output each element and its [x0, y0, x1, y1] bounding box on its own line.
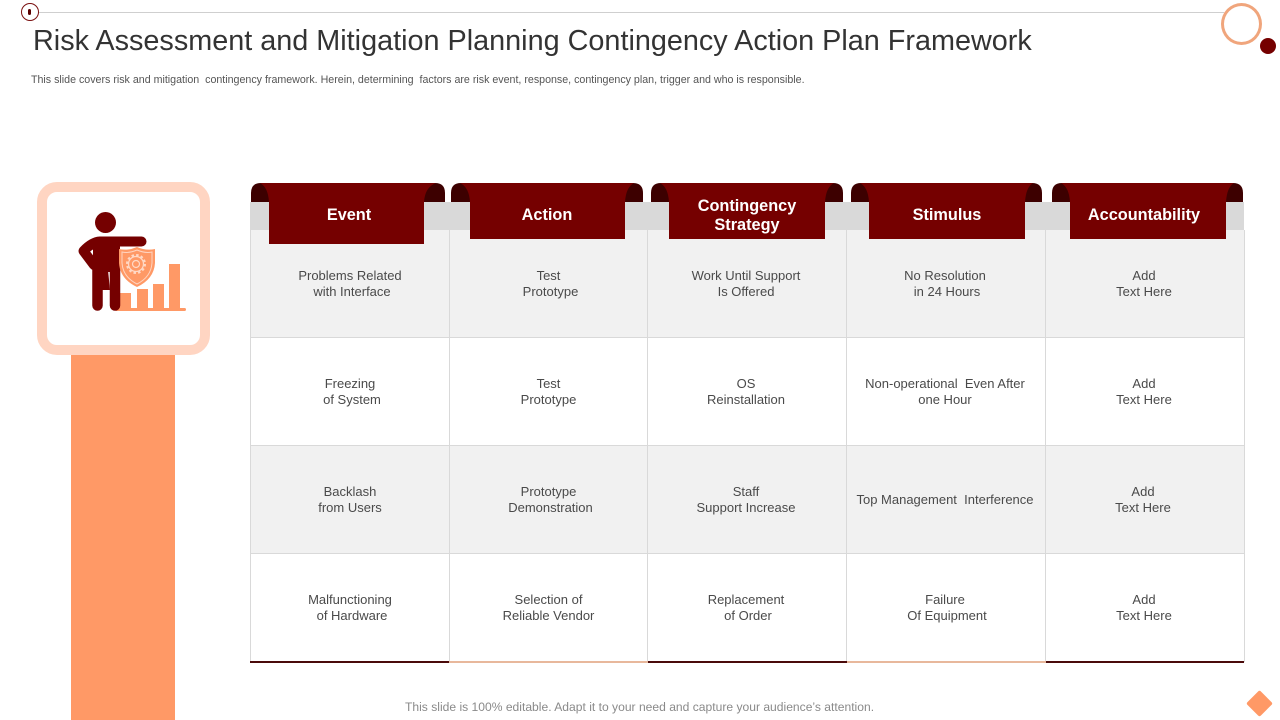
panel: table grey header band — [250, 202, 1244, 230]
row 4 — [250, 554, 1245, 662]
row 1: Is Offered — [718, 284, 774, 298]
row 2: of System — [323, 392, 381, 406]
icon: person with shield and bar chart — [78, 212, 186, 311]
header: Action: Action — [522, 206, 572, 224]
row 3: Staff — [733, 484, 759, 498]
row 4: Add — [1132, 592, 1156, 607]
header: Event: Event — [327, 206, 371, 224]
row 2 — [250, 338, 1245, 446]
row 3: Support Increase — [696, 500, 796, 514]
icon: top left marker — [21, 3, 39, 21]
header: Stimulus — [851, 183, 1042, 239]
footer note: This slide is 100% editable. Adapt it to your need and capture your audience’s attention. — [405, 700, 874, 714]
row 1: in 24 Hours — [914, 284, 980, 298]
table — [250, 230, 1245, 662]
header: Action — [451, 183, 643, 239]
panel: icon tile — [37, 182, 210, 355]
row 4: Of Equipment — [907, 608, 987, 623]
row 1 — [250, 230, 1245, 338]
row 4: Replacement — [708, 592, 784, 607]
row 2: one Hour — [918, 392, 972, 406]
row 4: Text Here — [1116, 608, 1172, 623]
row 1: Test — [537, 268, 560, 282]
header: Accountability: Accountability — [1088, 206, 1200, 224]
row 4: Selection of — [515, 592, 582, 607]
title: Risk Assessment and Mitigation Planning Contingency Action Plan Framework — [33, 25, 1032, 57]
row 1: No Resolution — [904, 268, 986, 282]
row 1: Work Until Support — [692, 268, 800, 282]
row 2: Add — [1132, 376, 1156, 390]
icon: top right dot — [1260, 38, 1276, 54]
row 2: Freezing — [325, 376, 375, 390]
row 3: Backlash — [324, 484, 376, 498]
row 3 — [250, 446, 1245, 554]
bottom rules — [250, 661, 1244, 663]
row 4: Failure — [925, 592, 965, 607]
icon: top right ring — [1221, 3, 1262, 45]
header: Contingency Strategy — [651, 183, 843, 239]
header: Stimulus: Stimulus — [913, 206, 981, 224]
row 2: Reinstallation — [707, 392, 785, 406]
icon: orange diamond — [1246, 690, 1273, 717]
row 3: Top Management Interference — [856, 492, 1034, 506]
row 1: Problems Related — [298, 268, 402, 282]
row 2: Non-operational Even After — [865, 376, 1025, 390]
row 1: Prototype — [523, 284, 578, 298]
row 4: of Hardware — [317, 608, 387, 623]
row 4: Malfunctioning — [308, 592, 392, 607]
row 1: Add — [1132, 268, 1156, 282]
row 2: Test — [537, 376, 560, 390]
panel: left orange column — [71, 350, 175, 720]
header: Accountability — [1052, 183, 1243, 239]
header: Event — [251, 183, 445, 244]
row 4: of Order — [724, 608, 772, 623]
subtitle: This slide covers risk and mitigation contingency framework. Herein, determining factors are risk event, response, contingency plan, trigger and who is responsible. — [31, 74, 805, 86]
row 4: Reliable Vendor — [503, 608, 594, 623]
row 3: Text Here — [1115, 500, 1171, 514]
row 1: Text Here — [1116, 284, 1172, 298]
top rule — [38, 12, 1224, 13]
row 3: Add — [1131, 484, 1155, 498]
row 1: with Interface — [313, 284, 391, 298]
row 2: Prototype — [521, 392, 576, 406]
row 2: OS — [737, 376, 755, 390]
header: Contingency Strategy: Contingency — [698, 196, 796, 214]
header: Contingency Strategy: Strategy — [714, 216, 780, 234]
row 3: Prototype — [521, 484, 576, 498]
row 3: from Users — [318, 500, 382, 514]
row 2: Text Here — [1116, 392, 1172, 406]
row 3: Demonstration — [508, 500, 593, 514]
